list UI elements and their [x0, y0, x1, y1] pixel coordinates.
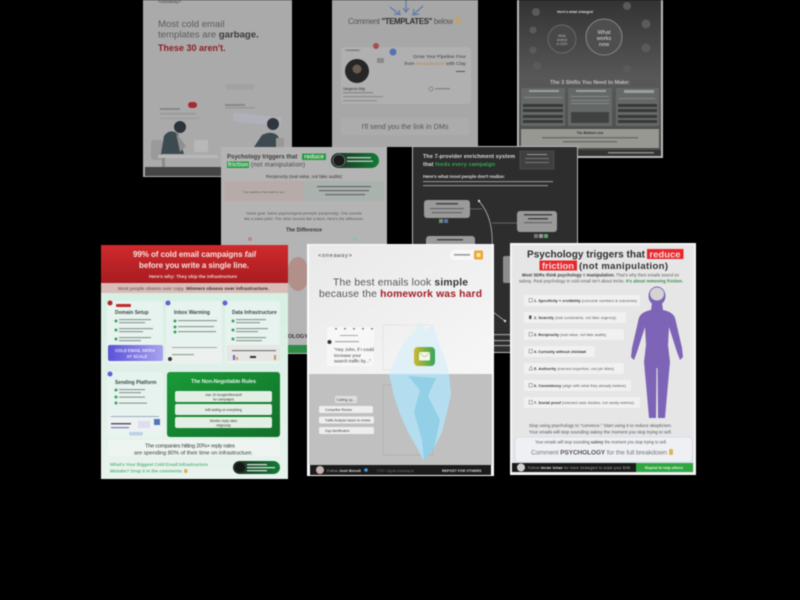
heading: psychology triggers: friction: [542, 261, 574, 272]
email sender row left: [160, 108, 200, 119]
caption strip: [494, 334, 510, 346]
icon: infinity badge: [188, 102, 197, 108]
comment callout: Your emails will stop sounding salesy the moment you stop trying to sell.: [535, 440, 667, 444]
profile card: [341, 43, 471, 104]
row: reciprocity: 3. Reciprocity (real value, not fake audits): [534, 333, 607, 337]
heading: the 3 shifts: The 3 Shifts You Need to Make:: [550, 80, 630, 86]
callout: reply rates: [108, 440, 280, 456]
author badge: [233, 461, 280, 474]
author badge: [331, 153, 379, 168]
explanation paragraph: like a sales pitch. The other sounds like a favor. Here's the difference:: [244, 216, 364, 221]
top right note: [520, 151, 554, 169]
row: specificity: 1. Specificity + credibility (concrete numbers & outcomes): [534, 299, 638, 303]
footer bar: CTO / signal.oneaway.ai: [377, 469, 414, 473]
footer bar: [512, 463, 693, 472]
thumbnail: cold email infra at scale: COLD EMAIL INFRA: [115, 348, 155, 353]
heading: most cold email templates: templates are garbage.: [158, 30, 259, 40]
digging up pill: Calling up...: [337, 398, 355, 402]
promo text: Grow Your Pipeline Free: [413, 54, 466, 60]
subheading: these 30 aren't: These 30 aren't.: [158, 43, 226, 53]
rule: A/B testing: A/B testing on everything: [205, 408, 242, 412]
heading: seven provider enrichment: The 7-provider enrichment system: [423, 154, 515, 160]
explanation paragraph: Same goal. Same psychological principle (reciprocity). One sounds: [246, 210, 362, 216]
iceberg: [389, 322, 451, 461]
call to action question: Mistake? Drop it in the comments: [110, 468, 182, 474]
illustration: stressed man at desk: [151, 121, 218, 167]
step box 4: [503, 256, 523, 283]
small paragraph: [423, 181, 553, 186]
list item: traffic analysis: Traffic Analysis based on review: [325, 418, 371, 422]
avatar: [345, 59, 369, 83]
bottom line box: The Bottom Line: [577, 131, 603, 135]
icon: pointing hand: [456, 17, 460, 24]
list item: gap identification: [319, 427, 374, 434]
circle: what used to work: worked: [557, 38, 567, 42]
callout: reply rates: are spending 80% of their time on infrastructure.: [134, 450, 253, 456]
arrows pointing down: [390, 0, 423, 15]
thumbnail: platform dashboard: [108, 414, 163, 431]
logo text: <oneaway>: [318, 252, 353, 259]
row: scarcity: [524, 312, 626, 323]
heading: psychology triggers: [527, 249, 684, 272]
heading: best emails look simple: [319, 278, 482, 300]
shift column 3: [616, 88, 659, 126]
footer bar: [519, 150, 661, 156]
panel: the non-negotiable rules: The Non-Negotiable Rules: [191, 379, 256, 385]
header band: 99% of cold email campaigns fail: [133, 250, 257, 259]
panel: psychology triggers front card: [510, 243, 696, 475]
subheading: most people don't realize: Here's what most people don't realize:: [423, 174, 505, 180]
DM callout: I'll send you the link in DMs: [362, 122, 449, 131]
step box 2: [517, 211, 557, 232]
header band: before you write a single line.: [139, 261, 249, 270]
step box 3: [426, 236, 475, 248]
call to action question: [110, 462, 208, 474]
callout: reply rates: The companies hitting 20%+ reply rates: [145, 444, 235, 450]
footer bar: [310, 465, 491, 475]
card: sending platform: [107, 372, 163, 437]
circle: what used to work: What: [558, 34, 566, 38]
footer bar: REPOST FOR OTHERS: [442, 469, 482, 473]
email preview card: search traffic by...": [334, 358, 371, 364]
row: authority: 5. Authority (earned expertise, not job titles): [534, 367, 615, 371]
step 1 icons: [439, 219, 448, 223]
brain illustration: [287, 257, 309, 291]
thumbnail: data chart: [227, 345, 280, 361]
header band: Here's why: They skip the infrastructure: [149, 274, 237, 280]
row: authority: [524, 363, 624, 374]
panel: enrichment system dark card: [412, 146, 578, 353]
highlight: reduce: reduce: [304, 154, 324, 160]
caption icon: [129, 432, 143, 436]
illustration: relaxed man at desk: [243, 118, 284, 153]
footer bar: Follow Josh Benoit: [327, 469, 361, 473]
thumbnail: cold email infra at scale: [108, 345, 163, 361]
circle: what works now: now: [599, 42, 610, 48]
heading: psychology triggers: Psychology triggers that: [527, 250, 646, 260]
shift column 2: [568, 88, 612, 126]
rule: separate domains: for campaigns: [213, 398, 234, 402]
thumbnail: warmup dashboard: [167, 345, 222, 361]
list item: competitor review: Competitor Review: [325, 408, 353, 412]
row: scarcity: 2. Scarcity (real constraints, not fake urgency): [534, 316, 617, 320]
orbit icons: [530, 2, 650, 73]
circle: what used to work: [548, 25, 576, 53]
email preview card: increase your: [334, 353, 362, 358]
heading: psychology triggers: Psychology triggers that: [227, 154, 297, 160]
heading second line: feeds every campaign: that feeds every campaign: [423, 162, 495, 168]
green bottom bar: [223, 345, 385, 353]
comment callout: Comment PSYCHOLOGY for the full breakdown: [531, 450, 667, 456]
intro text: Most SDRs think psychology = manipulation. That's why their emails sound so: [522, 272, 680, 278]
heading: comment templates below: Comment "TEMPLATES" below: [348, 17, 453, 26]
highlight: friction: friction: [228, 162, 248, 168]
header band: [101, 245, 288, 283]
heading second line: not manipulation: (not manipulation): [251, 162, 305, 168]
underwater area: [309, 374, 492, 465]
digging up pill: [335, 396, 357, 403]
person name: Sangeeta Wigi: [343, 87, 365, 91]
icon: pointing hand: [669, 449, 673, 455]
step box 1: [424, 200, 470, 218]
reciprocity label: Reciprocity (real value, not fake audits): [266, 174, 342, 179]
comparison box left: [224, 181, 304, 201]
faint guide boxes: [383, 325, 433, 370]
card: inbox warming: Inbox Warming: [174, 310, 210, 316]
shift column 1: [521, 88, 565, 126]
list item: competitor review: [319, 406, 373, 413]
subhead strip: [101, 283, 288, 293]
heading: best emails look simple: The best emails look simple: [333, 278, 468, 288]
footer bar: [145, 167, 221, 176]
closing text: Stop using psychology to "convince." Start using it to reduce skepticism.: [529, 423, 672, 428]
row: specificity: [524, 295, 640, 306]
card: domain setup: Domain Setup: [115, 310, 149, 316]
panel: comment templates card: [332, 0, 478, 147]
heading: best emails look simple: because the homework was hard: [319, 289, 482, 300]
panel: cold email templates card: [143, 0, 292, 177]
panel: 99 percent of cold email campaigns fail: [101, 245, 288, 479]
comment callout: [515, 437, 692, 462]
row: social proof: [524, 397, 640, 408]
intro text line two: salesy. Real psychology in cold email isn't about tricks. It's about removing friction.: [519, 278, 683, 284]
circle: what works now: [586, 19, 622, 55]
human figure with brain: [631, 286, 683, 418]
rule: separate domains: [175, 391, 272, 402]
email sender row right: [225, 84, 255, 108]
caption: Here's what changed: [557, 10, 593, 14]
rule: monitor reply rates: religiously: [216, 424, 231, 428]
card: data infrastructure: Data Infrastructure: [232, 310, 277, 316]
row: consistency: 6. Consistency (align with what they already believe): [534, 384, 627, 388]
panel: the non-negotiable rules: [167, 372, 280, 437]
rule: monitor reply rates: Monitor reply rates: [210, 419, 237, 423]
subhead strip: Most people obsess over copy. Winners obsess over infrastructure.: [118, 286, 269, 292]
email preview card: [327, 327, 374, 366]
top right button: [450, 250, 483, 260]
heading: psychology triggers: reduce: [649, 250, 681, 260]
thumbnail: cold email infra at scale: AT SCALE: [127, 354, 148, 359]
comparison box left: "I put together a free audit for you.": [242, 190, 286, 194]
panel: best emails iceberg card: [307, 244, 494, 476]
circle: what works now: What: [597, 30, 611, 36]
email preview card: "Hey John, if I could: [334, 347, 374, 352]
reply card: [233, 113, 281, 126]
icon: email badge: [414, 347, 435, 366]
circle: what used to work: in 2020: [557, 42, 567, 46]
icon: good marker: [353, 237, 357, 241]
icon: blue badge: [390, 48, 396, 56]
DM callout: [341, 118, 469, 135]
panel: psychology triggers back card: [221, 147, 387, 354]
promo text: from Housekeeper with Clay: [405, 62, 466, 67]
card: data infrastructure: [222, 300, 280, 364]
step 2 icons: [534, 234, 548, 238]
profile card: <oneaway>: [345, 48, 361, 52]
list item: gap identification: Gap identification: [325, 429, 350, 433]
icon: red badge: [373, 43, 379, 49]
card: domain setup: [107, 300, 163, 364]
connector dots: [478, 200, 506, 322]
row: social proof: 7. Social proof (relevant case studies, not vanity metrics): [534, 401, 635, 405]
heading: most cold email templates: Most cold email: [158, 19, 225, 30]
list item: traffic analysis: [319, 416, 374, 424]
closing text line two: Your emails will stop sounding salesy the moment you stop trying to sell.: [529, 430, 672, 434]
icon: bad marker: [248, 237, 252, 241]
footer bar: Follow Imran Ishan for more strategies to scale your B2B: [528, 466, 631, 470]
heading: psychology triggers: (not manipulation): [579, 261, 668, 272]
row: curiosity: [524, 346, 595, 357]
comparison box right: [304, 181, 384, 201]
row: consistency: [524, 380, 631, 391]
circle: what works now: works: [596, 36, 612, 42]
footer bar: Repost to help others: [645, 466, 683, 470]
connector arc: [470, 201, 517, 321]
row: reciprocity: [524, 329, 624, 340]
panel: three shifts dark card: [517, 0, 663, 158]
bottom line box: [521, 129, 659, 148]
rule: separate domains: Use 15 Google/Microsoft: [205, 393, 242, 397]
card: inbox warming: [166, 300, 222, 364]
card: sending platform: Sending Platform: [115, 380, 157, 386]
heading: the difference: The Difference: [286, 228, 322, 234]
rule: monitor reply rates: [175, 417, 272, 428]
row: curiosity: 4. Curiosity without clickbait: [534, 350, 587, 354]
call to action question: What's Your Biggest Cold Email Infrastructure: [110, 462, 208, 467]
cut-off word: OLOGY: [288, 334, 308, 340]
